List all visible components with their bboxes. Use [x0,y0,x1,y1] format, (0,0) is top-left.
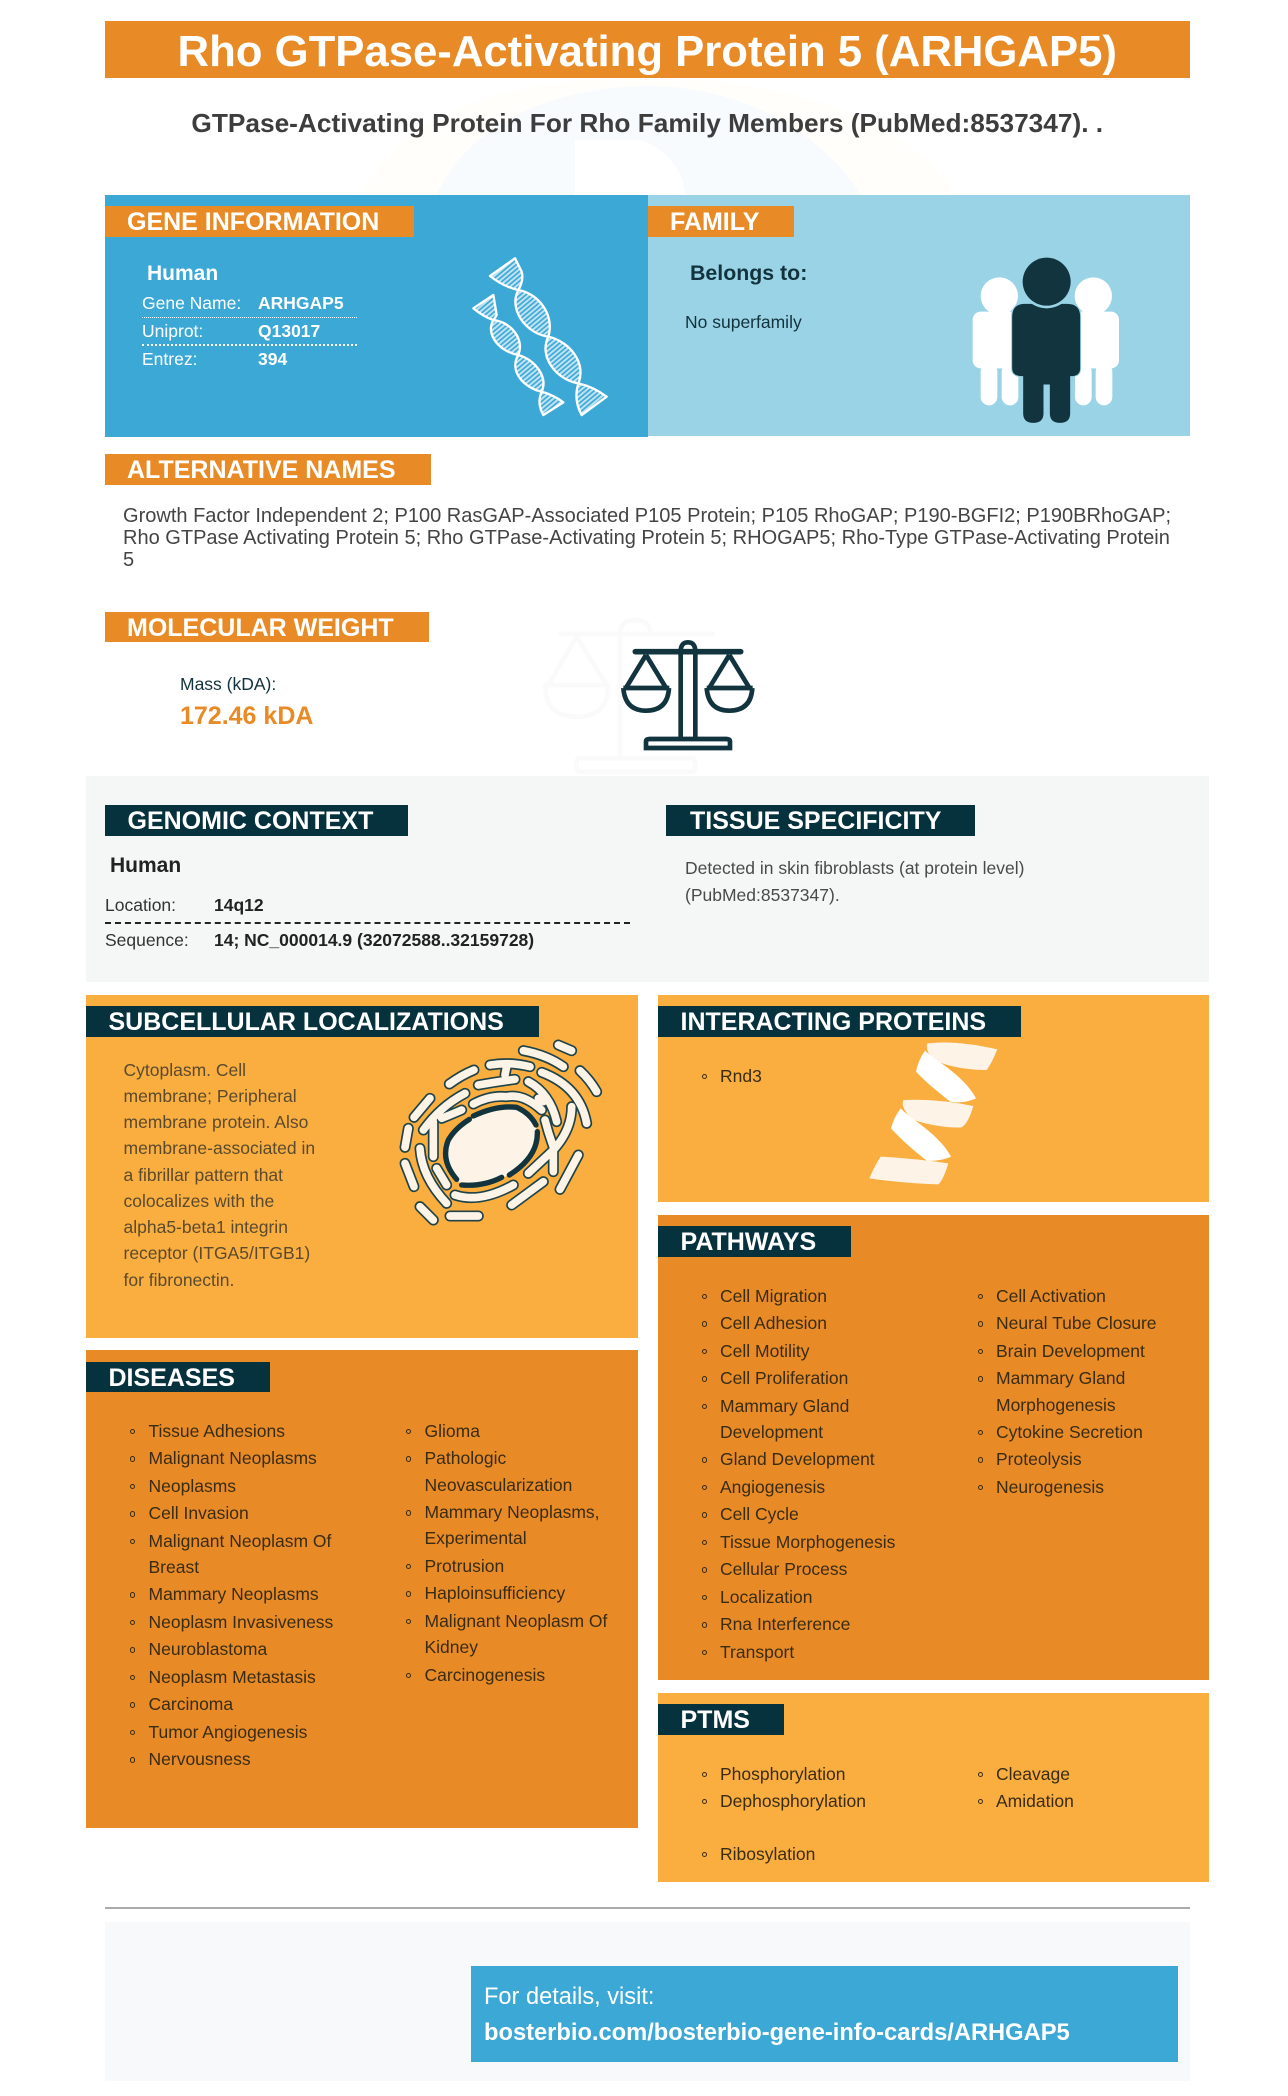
list: pathways column 2 [978,1286,1156,1497]
list: PTMs column 1: Ribosylation [720,1844,815,1864]
list: pathways column 2: Mammary Gland [996,1368,1125,1388]
text: mass value: 172.46 kDA [180,702,313,730]
icon: family of people [972,258,1119,423]
icon: protein helix ribbon [869,1042,998,1184]
list: pathways column 1: Angiogenesis [720,1477,825,1497]
text: alternative names: 5 [123,549,134,571]
panel: interacting proteins [658,995,1209,1202]
heading: pathways [658,1226,851,1257]
text: localization description: membrane; Peripheral [124,1086,297,1106]
list: diseases column 1: Tissue Adhesions [148,1421,285,1441]
list: diseases column 2 [406,1421,608,1685]
heading: diseases: DISEASES [108,1364,235,1392]
list: diseases column 2: Haploinsufficiency [424,1583,565,1603]
list: diseases column 2: Experimental [424,1528,527,1548]
heading: gene information: GENE INFORMATION [127,208,379,236]
list: pathways column 2: Neural Tube Closure [996,1313,1156,1333]
list: diseases column 1: Tumor Angiogenesis [148,1722,307,1742]
list: pathways column 1: Cell Adhesion [720,1313,827,1333]
text: genomic species: Human [110,854,181,877]
text: localization description: membrane protein. Also [124,1112,308,1132]
list: pathways column 2: Neurogenesis [996,1477,1104,1497]
list: diseases column 1: Neoplasm Invasiveness [148,1612,333,1632]
list: PTMs column 2: Amidation [996,1791,1074,1811]
heading: subcellular localizations: SUBCELLULAR LOCALIZATIONS [108,1008,504,1036]
list: pathways column 1: Cell Proliferation [720,1368,848,1388]
text: localization description: a fibrillar pattern that [124,1164,283,1184]
list: pathways column 2: Proteolysis [996,1449,1082,1469]
text: localization description: for fibronectin. [124,1270,234,1290]
text: alternative names [123,505,1171,571]
subtitle: GTPase-Activating Protein For Rho Family Members (PubMed:8537347). . [191,108,1103,138]
list: diseases column 1: Mammary Neoplasms [148,1584,319,1604]
heading: alternative names: ALTERNATIVE NAMES [127,456,396,484]
list: PTMs column 2: Cleavage [996,1764,1070,1784]
text: localization description: alpha5-beta1 integrin [124,1217,288,1237]
panel: gene information [105,195,648,437]
list: pathways column 2: Brain Development [996,1341,1145,1361]
list: diseases column 2: Glioma [424,1421,480,1441]
list: diseases column 1: Malignant Neoplasms [148,1448,317,1468]
text: mass label: Mass (kDA): [180,674,276,694]
list: PTMs column 1: Phosphorylation [720,1764,846,1784]
text: localization description [124,1060,315,1290]
icon: DNA helices [472,257,608,416]
location value: 14q12 [214,895,264,915]
list: pathways column 2: Cytokine Secretion [996,1422,1143,1442]
icon: balance scale [621,640,755,750]
list: pathways column 1: Rna Interference [720,1614,850,1634]
list: diseases column 2: Neovascularization [424,1475,572,1495]
text: tissue specificity: Detected in skin fibroblasts (at protein level) [685,858,1024,878]
heading: pathways: PATHWAYS [680,1228,816,1256]
panel: subcellular localizations [86,995,638,1338]
text: tissue specificity [685,858,1024,905]
panel: genomic context and tissue specificity [86,776,1209,982]
list: diseases column 2: Malignant Neoplasm Of [424,1611,607,1631]
text: localization description: Cytoplasm. Cell [124,1060,246,1080]
list: diseases column 1: Cell Invasion [148,1503,249,1523]
text: alternative names: Growth Factor Independent 2; P100 RasGAP-Associated P105 Protein; P105 RhoGAP; P190-BGFI2; P190BRhoGAP; [123,505,1171,527]
text: tissue specificity: (PubMed:8537347). [685,885,840,905]
heading: PTMs: PTMS [680,1706,750,1734]
text: localization description: receptor (ITGA5/ITGB1) [124,1243,310,1263]
list: diseases column 2: Mammary Neoplasms, [424,1502,600,1522]
text: url: bosterbio.com/bosterbio-gene-info-cards/ARHGAP5 [484,2020,1070,2046]
watermark: faint logo arcs [340,70,980,200]
text: visit label: For details, visit: [484,1984,654,2010]
heading: family: FAMILY [670,208,759,236]
list: diseases column 1 [130,1421,333,1769]
list: diseases column 2: Protrusion [424,1556,504,1576]
location label: Location: [105,895,176,915]
list: diseases column 1: Neoplasm Metastasis [148,1667,316,1687]
list: diseases column 1: Breast [148,1557,199,1577]
list: diseases column 2: Carcinogenesis [424,1665,545,1685]
text: no superfamily: No superfamily [685,312,802,332]
list: diseases column 1: Malignant Neoplasm Of [148,1531,331,1551]
list: diseases column 2: Pathologic [424,1448,506,1468]
panel: diseases [86,1350,638,1828]
uniprot value: Q13017 [258,321,320,341]
list: diseases column 1: Nervousness [148,1749,251,1769]
list: pathways column 1: Tissue Morphogenesis [720,1532,895,1552]
panel: family [648,195,1190,436]
icon: cell organelle [400,1040,602,1226]
heading: diseases [86,1362,270,1392]
text: localization description: colocalizes with the [124,1191,274,1211]
list: pathways column 2: Morphogenesis [996,1395,1116,1415]
gene details table [142,293,357,369]
list: pathways column 1: Cell Migration [720,1286,827,1306]
list: pathways column 1: Cell Motility [720,1341,809,1361]
heading: family [648,206,794,237]
heading: tissue specificity: TISSUE SPECIFICITY [690,807,941,835]
panel: PTMs [658,1693,1209,1882]
list: pathways column 1: Cell Cycle [720,1504,799,1524]
list: pathways column 1: Transport [720,1642,794,1662]
sequence label: Sequence: [105,930,189,950]
list: PTMs column 1: Dephosphorylation [720,1791,866,1811]
entrez label: Entrez: [142,349,197,369]
heading: PTMs [658,1704,784,1735]
panel: pathways [658,1215,1209,1680]
list: pathways column 2: Cell Activation [996,1286,1106,1306]
title banner: Rho GTPase-Activating Protein 5 (ARHGAP5) [178,27,1117,76]
sequence value: 14; NC_000014.9 (32072588..32159728) [214,930,534,950]
list: pathways column 1: Development [720,1422,823,1442]
list: interacting proteins: Rnd3 [720,1066,762,1086]
text: species: Human [147,262,218,285]
heading: molecular weight: MOLECULAR WEIGHT [127,614,394,642]
list: pathways column 1: Gland Development [720,1449,875,1469]
icon: faint watermark scale [520,610,780,780]
list: diseases column 1: Neoplasms [148,1476,236,1496]
callout: details link [471,1966,1178,2062]
uniprot label: Uniprot: [142,321,203,341]
list: diseases column 1: Neuroblastoma [148,1639,267,1659]
text: alternative names: Rho GTPase Activating Protein 5; Rho GTPase-Activating Protein 5; RHOGAP5; Rho-Type GTPase-Activating Protein [123,527,1170,549]
heading: genomic context: GENOMIC CONTEXT [128,807,373,835]
gene name value: ARHGAP5 [258,293,344,313]
list: pathways column 1 [702,1286,895,1662]
list: pathways column 1: Cellular Process [720,1559,847,1579]
panel: footer [105,1922,1190,2081]
list: pathways column 1: Mammary Gland [720,1396,849,1416]
heading: interacting proteins: INTERACTING PROTEINS [680,1008,986,1036]
list: pathways column 1: Localization [720,1587,812,1607]
text: localization description: membrane-associated in [124,1138,315,1158]
list: PTMs column 2 [978,1764,1074,1811]
list: diseases column 1: Carcinoma [148,1694,233,1714]
text: belongs to: Belongs to: [690,261,807,285]
list: diseases column 2: Kidney [424,1637,478,1657]
gene name label: Gene Name: [142,293,241,313]
list: PTMs column 1 [702,1764,866,1864]
entrez value: 394 [258,349,287,369]
